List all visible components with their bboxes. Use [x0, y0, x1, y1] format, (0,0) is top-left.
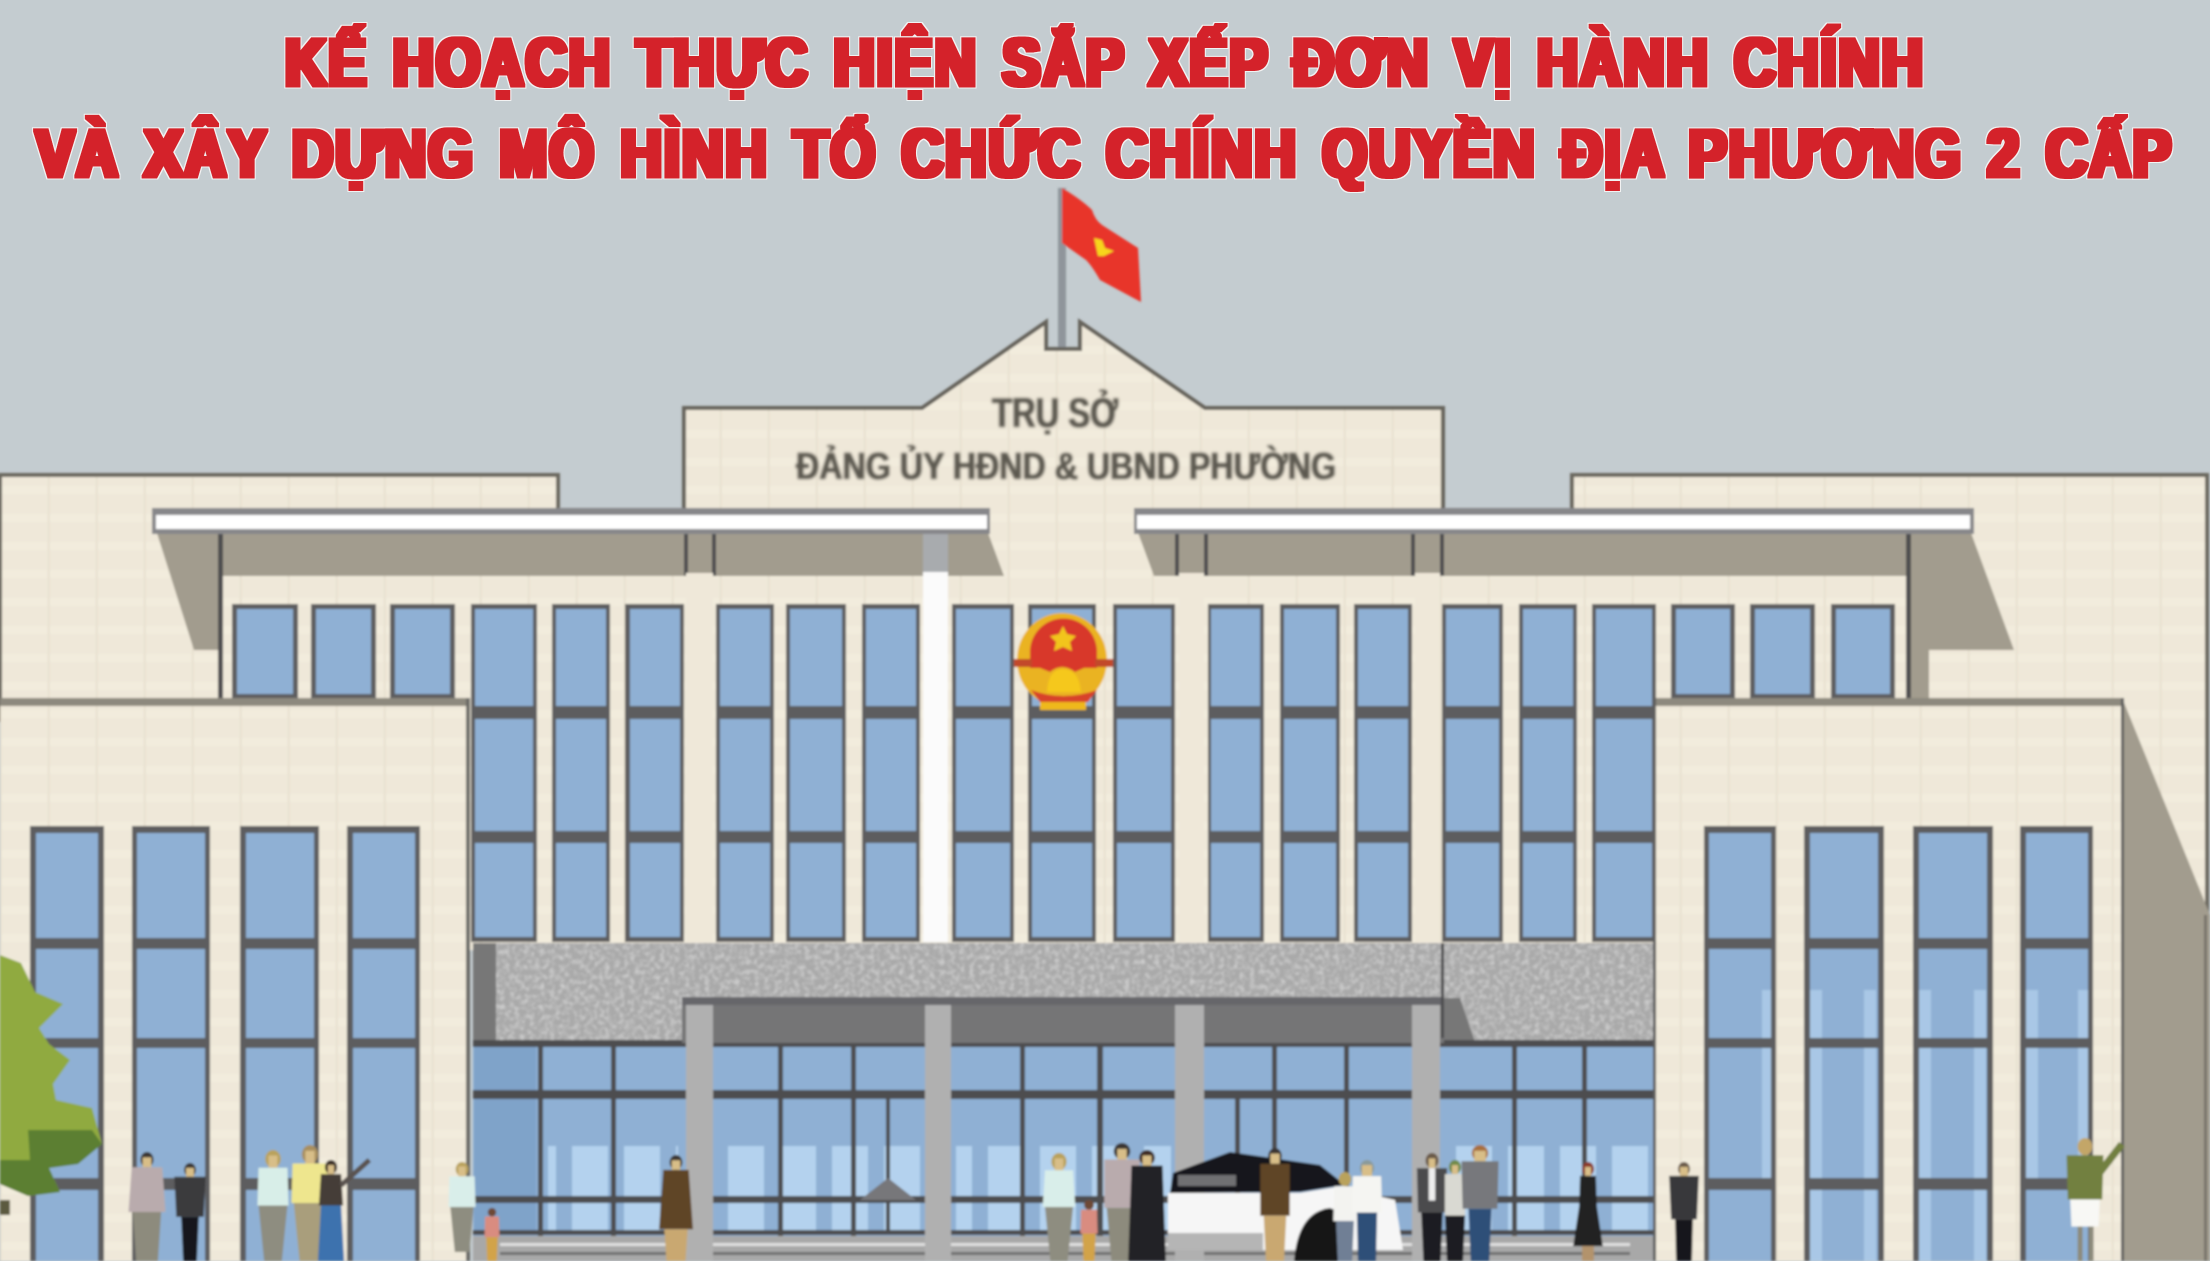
upper left wing	[0, 475, 558, 720]
white central pier	[923, 530, 948, 942]
podium left shadow	[473, 943, 496, 1043]
right wing shadow	[2123, 700, 2210, 1261]
people	[128, 1138, 2122, 1261]
left canopy	[152, 508, 990, 534]
person: pink shirt	[128, 1152, 166, 1261]
person: waving, green shirt	[2067, 1138, 2122, 1261]
person: white shirt near centre	[1043, 1153, 1075, 1261]
person: grey suit	[1104, 1143, 1140, 1261]
person: white and black	[1445, 1160, 1465, 1261]
entrance lintel line	[682, 997, 1444, 1005]
person: brown coat	[659, 1155, 693, 1261]
upper right wing	[1572, 475, 2207, 920]
sign: head office: TRỤ SỞ	[992, 388, 1118, 436]
right wing edge line	[2204, 915, 2207, 1261]
person: dark suit	[1417, 1153, 1447, 1261]
lower left block	[0, 698, 470, 1261]
sign: party committee and people's committee: ĐẢNG ỦY HĐND & UBND PHƯỜNG	[796, 444, 1336, 488]
person: black suit	[1669, 1162, 1699, 1261]
podium granite band	[473, 943, 1655, 1043]
car	[1168, 1152, 1403, 1261]
tree	[0, 955, 102, 1215]
granite piers	[686, 943, 1444, 1261]
central piers	[686, 573, 1440, 943]
person: dark suit	[174, 1163, 206, 1261]
lower right block	[1653, 698, 2124, 1261]
person: small white shirt	[1333, 1172, 1357, 1261]
title	[36, 24, 2173, 192]
central facade	[218, 510, 1910, 950]
person: mint shirt	[257, 1150, 289, 1261]
person: grey jacket, jeans	[1461, 1145, 1499, 1261]
national emblem	[1014, 613, 1113, 710]
person: black outfit	[1128, 1150, 1166, 1261]
podium right shadow	[1443, 998, 1475, 1042]
child: pink	[485, 1208, 499, 1261]
entrance steps	[473, 1236, 1655, 1261]
Vietnamese flag	[1062, 188, 1141, 302]
right canopy	[1134, 508, 1974, 534]
person: yellow shirt	[291, 1145, 329, 1261]
central gable block	[684, 322, 1443, 530]
person: jeans with raised arm	[318, 1160, 369, 1261]
person: brown coat by car	[1260, 1148, 1290, 1261]
upper side windows	[232, 604, 1895, 699]
child: centre	[1080, 1200, 1098, 1261]
central window columns	[471, 604, 1656, 942]
person: black dress	[1573, 1162, 1603, 1261]
flag pole	[1058, 188, 1066, 350]
canopy shadows	[156, 530, 2014, 700]
person: white shirt	[448, 1162, 476, 1252]
ground floor glazing	[473, 1040, 1655, 1237]
person: white shirt, jeans	[1352, 1160, 1382, 1261]
entrance soffit	[682, 1003, 1444, 1043]
